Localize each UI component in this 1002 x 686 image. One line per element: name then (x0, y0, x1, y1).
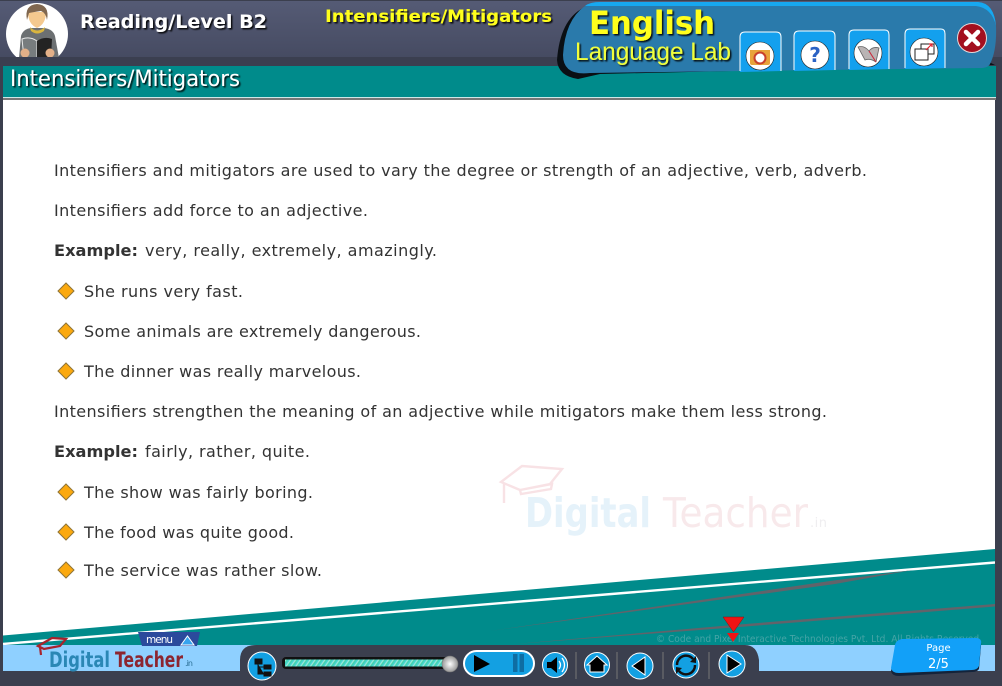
bullet: service: The service was rather slow. (83, 561, 322, 580)
header band (0, 1, 1002, 66)
digital teacher logo: Digital (49, 648, 110, 672)
bullet: dinner: The dinner was really marvelous. (83, 362, 361, 381)
english language lab panel: English (589, 4, 715, 42)
bullet: food: The food was quite good. (83, 523, 294, 542)
bullet: show: The show was fairly boring. (83, 483, 313, 502)
icon: sound (542, 652, 568, 678)
header: topic: Intensifiers/Mitigators (325, 7, 552, 27)
progress bar (282, 656, 458, 672)
explanation: Intensifiers strengthen the meaning of an adjective while mitigators make them less strong. (54, 402, 827, 421)
teal footer wave (3, 549, 995, 645)
bullet: animals: Some animals are extremely dangerous. (84, 322, 421, 341)
page counter: 2/5 (928, 657, 949, 672)
icon: refresh (673, 652, 699, 678)
tab: help: ? (809, 43, 821, 67)
example list 1: Example: (54, 241, 138, 260)
watermark logo: Teacher (662, 489, 808, 537)
title bar: Intensifiers/Mitigators (10, 67, 240, 92)
digital teacher logo (38, 638, 193, 672)
digital teacher logo: Teacher (115, 648, 183, 672)
page counter (891, 638, 981, 676)
content panel (3, 100, 995, 645)
english language lab panel: Language Lab (575, 38, 731, 66)
example list 2: Example: (54, 442, 138, 461)
icon: close button (958, 24, 986, 52)
tab: glossary (849, 30, 889, 70)
menu tab: menu (146, 634, 173, 646)
icon: back (627, 653, 653, 679)
menu tab (138, 632, 200, 646)
play pause control (464, 651, 534, 676)
watermark logo (501, 466, 827, 537)
tab: window (905, 29, 945, 69)
tab: help (794, 31, 835, 71)
icon: next (719, 651, 745, 677)
title bar (3, 66, 996, 100)
control bar (240, 645, 759, 686)
icon: tree menu button (248, 652, 276, 680)
red position marker (723, 617, 744, 642)
light blue footer strip (3, 645, 995, 671)
example list 2: fairly, rather, quite. (145, 442, 310, 461)
bullet: she runs: She runs very fast. (84, 282, 243, 301)
definition: Intensifiers add force to an adjective. (54, 201, 368, 220)
intro sentence: Intensifiers and mitigators are used to vary the degree or strength of an adjective, verb, adverb. (54, 161, 867, 180)
watermark logo: .in (810, 516, 827, 531)
watermark logo: Digital (525, 489, 651, 537)
example list 2 (54, 442, 310, 461)
icon: home (584, 652, 610, 678)
english language lab panel (557, 2, 996, 79)
digital teacher logo: .in (185, 659, 193, 668)
header: level: Reading/Level B2 (80, 11, 267, 33)
tab: history (740, 32, 781, 72)
icon: student reading avatar (6, 3, 68, 57)
example list 1: very, really, extremely, amazingly. (145, 241, 437, 260)
page counter: Page (926, 643, 951, 654)
